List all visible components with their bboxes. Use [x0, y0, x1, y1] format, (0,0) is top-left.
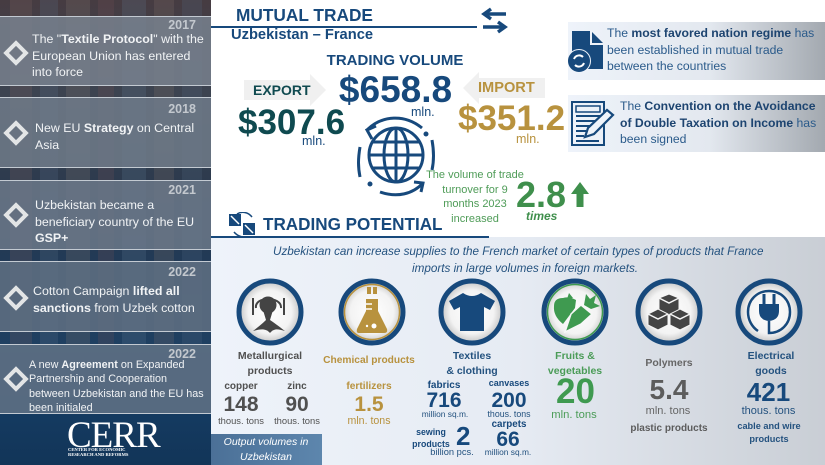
label: textiles — [446, 350, 498, 377]
label: electrical: Electrical — [748, 350, 794, 362]
unit: fertilizers: mln. tons — [348, 415, 390, 427]
unit: fabrics: million sq.m. — [422, 409, 468, 419]
text: potential intro: Uzbekistan can increase supplies to the French market of certain types of products that France — [273, 245, 763, 258]
title: trading potential: TRADING POTENTIAL — [263, 215, 442, 234]
label: fabrics: fabrics — [428, 380, 460, 391]
text: agreement: between Uzbekistan and the EU has — [29, 388, 204, 400]
label: chemical: Chemical products — [323, 355, 415, 366]
text: cotton campaign: Cotton Campaign lifted all — [33, 284, 180, 298]
unit: zinc: thous. tons — [274, 415, 320, 426]
icon: diamond 2017 — [3, 40, 28, 66]
value: fertilizers: 1.5 — [354, 393, 384, 416]
value: canvases: 200 — [491, 389, 527, 412]
text: agreement — [29, 359, 204, 414]
unit: canvases: thous. tons — [487, 409, 531, 419]
unit: electrical: thous. tons — [742, 405, 795, 417]
text: turnover note: turnover for 9 — [442, 184, 508, 196]
label: sewing products: products — [412, 439, 450, 449]
unit: copper: thous. tons — [218, 415, 264, 426]
text: turnover note: increased — [451, 213, 499, 225]
label: electrical: goods — [755, 365, 787, 377]
text: EU strategy: Asia — [35, 138, 59, 152]
icon: diamond 2021 — [3, 202, 28, 228]
icon: electrical plug — [736, 278, 802, 346]
icon: trading potential — [229, 212, 255, 236]
unit: total: mln. — [411, 105, 435, 119]
panel: 2021 milestone — [0, 180, 211, 250]
text: most favored nation: The most favored nation regime has — [607, 26, 814, 40]
value: sewing products: 2 — [456, 421, 470, 451]
value: export: $307.6 — [238, 103, 345, 142]
text: most favored nation — [607, 26, 814, 73]
logo: CERR: CERR — [67, 415, 160, 456]
label: sewing products — [412, 427, 450, 449]
panel: timeline sidebar — [0, 0, 211, 465]
icon: metallurgy — [236, 278, 304, 346]
unit: polymers: mln. tons — [646, 405, 690, 417]
panel: 2018 milestone — [0, 97, 211, 168]
label: fertilizers: fertilizers — [346, 381, 392, 392]
panel: 2017 milestone — [0, 16, 211, 86]
unit: fruits: mln. tons — [551, 409, 597, 421]
label: polymers: Polymers — [645, 357, 693, 369]
value: fabrics: 716 — [426, 389, 462, 412]
unit: export: mln. — [302, 134, 326, 148]
label: copper: copper — [224, 381, 258, 392]
icon: diamond agreement — [3, 366, 28, 392]
label: canvases: canvases — [489, 378, 529, 388]
text: GSP+: GSP+ — [35, 231, 68, 245]
arrow: export — [244, 74, 326, 106]
divider: potential rule — [211, 236, 489, 238]
label: fruits: Fruits & — [555, 350, 595, 362]
label: metallurgical: products — [248, 365, 292, 377]
label: fruits: vegetables — [548, 365, 602, 377]
text: agreement: Partnership and Cooperation — [29, 373, 167, 385]
year 2018: 2018 — [168, 102, 196, 116]
value: total: $658.8 — [339, 69, 452, 110]
panel: double taxation convention — [568, 95, 825, 152]
unit: carpets: million sq.m. — [485, 447, 531, 457]
label: carpets: carpets — [492, 419, 526, 430]
text: most favored nation: between the countries — [607, 59, 726, 73]
value: copper: 148 — [223, 393, 259, 416]
callout: output volumes: Uzbekistan — [240, 451, 292, 463]
icon: growth arrow — [571, 182, 589, 207]
panel: 2022 agreement milestone — [0, 344, 211, 414]
label: plastic products: plastic products — [630, 423, 708, 434]
text: textile protocol: into force — [32, 65, 83, 79]
text: convention — [620, 99, 816, 146]
label: import: IMPORT — [478, 80, 535, 96]
value: polymers: 5.4 — [650, 374, 688, 405]
text: GSP+ — [35, 198, 194, 245]
heading: trading volume: TRADING VOLUME — [327, 52, 463, 69]
year 2022 agreement: 2022 — [168, 347, 196, 361]
text: textile protocol: The "Textile Protocol" with the — [32, 32, 204, 46]
unit: times: times — [526, 209, 557, 223]
text: cotton campaign — [33, 284, 195, 315]
text: convention: The Convention on the Avoidance — [620, 99, 815, 113]
icon: diamond cotton — [3, 285, 28, 311]
label: textiles: & clothing — [446, 365, 498, 377]
value: growth: 2.8 — [516, 174, 566, 215]
text: turnover note: The volume of trade — [426, 169, 524, 181]
label: export: EXPORT — [253, 82, 311, 98]
text: turnover note: months 2023 — [443, 198, 507, 210]
text: turnover note — [426, 169, 524, 225]
text: textile protocol — [32, 32, 204, 79]
year 2017: 2017 — [168, 18, 196, 32]
icon: t-shirt — [438, 278, 506, 346]
text: most favored nation: been established in mutual trade — [607, 43, 783, 57]
icon: diamond 2018 — [3, 120, 28, 146]
callout: output volumes: Output volumes in — [224, 436, 308, 448]
text: agreement: been initialed — [29, 402, 93, 414]
label: metallurgical — [238, 350, 302, 377]
icon: globe with circular arrows — [357, 116, 435, 196]
text: EU strategy — [35, 121, 194, 152]
unit: import: mln. — [516, 132, 540, 146]
panel: most favored nation — [568, 22, 825, 80]
icon: contract and pen — [571, 101, 615, 146]
text: GSP+: beneficiary country of the EU — [35, 215, 194, 229]
panel: trading potential background — [211, 237, 825, 465]
unit: sewing products: billion pcs. — [430, 447, 474, 457]
text: potential intro: imports in large volumes in foreign markets. — [412, 262, 638, 275]
text: convention: been signed — [620, 132, 686, 146]
text: cotton campaign: sanctions from Uzbek cotton — [33, 301, 195, 315]
logo: CERR: CENTER FOR ECONOMIC — [68, 447, 125, 452]
label: cable products — [737, 421, 801, 444]
arrow: import — [464, 72, 545, 104]
text: convention: of Double Taxation on Income has — [620, 116, 816, 130]
label: fruits — [548, 350, 602, 377]
label: zinc: zinc — [287, 381, 307, 392]
year 2022: 2022 — [168, 265, 196, 279]
icon: polymers cubes — [636, 278, 702, 346]
value: zinc: 90 — [285, 393, 309, 416]
panel: 2022 cotton milestone — [0, 261, 211, 332]
label: textiles: Textiles — [453, 350, 491, 362]
label: sewing products: sewing — [416, 427, 446, 437]
logo: CERR: RESEARCH AND REFORMS — [68, 452, 128, 457]
text: potential intro — [273, 245, 764, 275]
value: carpets: 66 — [496, 428, 520, 451]
value: import: $351.2 — [458, 99, 565, 138]
text: agreement: A new Agreement on Expanded — [29, 359, 184, 371]
value: fruits: 20 — [556, 372, 595, 411]
text: EU strategy: New EU Strategy on Central — [35, 121, 194, 135]
title: mutual trade: MUTUAL TRADE — [236, 5, 373, 25]
value: electrical: 421 — [747, 377, 790, 407]
label: cable products: cable and wire — [737, 421, 801, 431]
icon: chemical flask — [338, 278, 406, 346]
subtitle: countries: Uzbekistan – France — [231, 27, 373, 43]
label: cable products: products — [749, 434, 789, 444]
text: textile protocol: European Union has entered — [32, 49, 190, 63]
label: electrical — [748, 350, 794, 377]
icon: document with refresh — [568, 31, 603, 72]
icon: fruits and vegetables — [542, 278, 608, 346]
icon: exchange arrows — [481, 8, 508, 34]
year 2021: 2021 — [168, 183, 196, 197]
label: metallurgical: Metallurgical — [238, 350, 302, 362]
divider: title rule — [211, 26, 477, 28]
callout: output volumes — [211, 434, 322, 465]
text: GSP+: Uzbekistan became a — [35, 198, 154, 212]
